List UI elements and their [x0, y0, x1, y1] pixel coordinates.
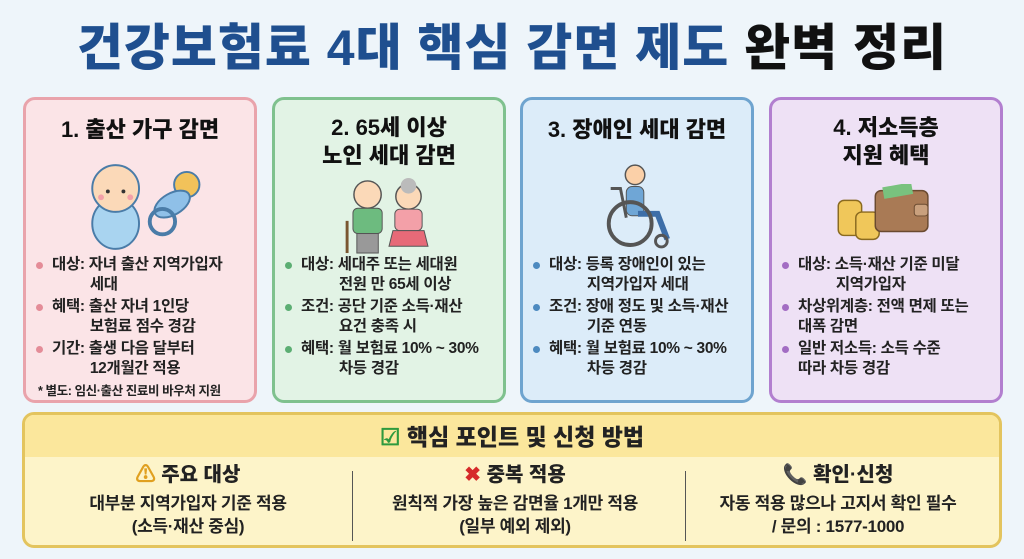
bottom heading: ☑ 핵심 포인트 및 신청 방법	[380, 424, 644, 450]
text list	[285, 256, 479, 377]
text list: 지역가입자 세대	[587, 276, 689, 293]
column: 주요 대상: ⚠ 주요 대상	[136, 464, 240, 486]
panel heading: 지원 혜택	[842, 143, 930, 168]
text list: 대상: 세대주 또는 세대원	[301, 256, 457, 273]
column: 확인·신청: 자동 적용 많으나 고지서 확인 필수	[720, 494, 956, 513]
panel: bottom key points	[22, 412, 1002, 548]
text list: 조건: 공단 기준 소득·재산	[301, 298, 462, 315]
text list	[533, 256, 728, 377]
text list: 지역가입자	[836, 276, 906, 293]
text list: 조건: 장애 정도 및 소득·재산	[549, 298, 728, 315]
column: 주요 대상	[89, 464, 287, 536]
column: 중복 적용	[392, 464, 638, 536]
text list: 전원 만 65세 이상	[339, 276, 451, 293]
bottom heading	[25, 415, 999, 457]
text list: 일반 저소득: 소득 수준	[798, 340, 941, 357]
text list: 대상: 소득·재산 기준 미달	[798, 256, 959, 273]
panel heading: 2. 65세 이상	[331, 115, 447, 140]
icon: wheelchair	[606, 164, 670, 248]
column: 주요 대상: 대부분 지역가입자 기준 적용	[89, 494, 287, 513]
text list: 대상: 자녀 출산 지역가입자	[52, 256, 222, 273]
panel: 장애인	[520, 97, 754, 403]
panel heading: 3. 장애인 세대 감면	[548, 117, 726, 142]
text list: 혜택: 월 보험료 10% ~ 30%	[549, 340, 727, 357]
column: 중복 적용: (일부 예외 제외)	[459, 517, 571, 536]
text list: 보험료 점수 경감	[90, 318, 196, 335]
text list: 세대	[90, 276, 118, 293]
text list: 대상: 등록 장애인이 있는	[549, 256, 705, 273]
panel heading: 1. 출산 가구 감면	[61, 117, 219, 142]
text list	[36, 256, 222, 398]
panel heading	[833, 115, 939, 168]
text list: 대폭 감면	[798, 318, 858, 335]
column: 주요 대상: (소득·재산 중심)	[132, 517, 244, 536]
text list: 차등 경감	[339, 360, 399, 377]
text list: 혜택: 출산 자녀 1인당	[52, 298, 189, 315]
column: 중복 적용: ✖ 중복 적용	[464, 464, 566, 486]
title: 건강보험료 4대 핵심 감면 제도 완벽 정리	[77, 20, 947, 76]
panel: 65세 이상	[272, 97, 506, 403]
text list: 혜택: 월 보험료 10% ~ 30%	[301, 340, 479, 357]
column: 중복 적용: 원칙적 가장 높은 감면율 1개만 적용	[392, 494, 638, 513]
column: 확인·신청	[720, 463, 956, 536]
text list: 기준 연동	[587, 318, 647, 335]
icon: elderly couple	[346, 178, 429, 254]
column: 확인·신청: 📞 확인·신청	[783, 464, 893, 486]
panel heading: 4. 저소득층	[833, 115, 939, 140]
icon: baby and pacifier	[91, 164, 200, 250]
text list: 따라 차등 경감	[798, 360, 890, 377]
text list: * 별도: 임신·출산 진료비 바우처 지원	[38, 384, 221, 398]
panel: 저소득층	[769, 97, 1003, 403]
text list: 차등 경감	[587, 360, 647, 377]
text list: 요건 충족 시	[339, 318, 417, 335]
text list: 기간: 출생 다음 달부터	[52, 340, 195, 357]
panel heading	[322, 115, 456, 168]
text list: 12개월간 적용	[90, 360, 180, 377]
panel heading: 노인 세대 감면	[322, 143, 456, 168]
column: 확인·신청: / 문의 : 1577-1000	[772, 517, 904, 536]
text list	[782, 256, 968, 377]
icon: coins and wallet	[838, 184, 929, 240]
panel: 출산 가구	[23, 97, 257, 403]
text list: 차상위계층: 전액 면제 또는	[798, 298, 968, 315]
